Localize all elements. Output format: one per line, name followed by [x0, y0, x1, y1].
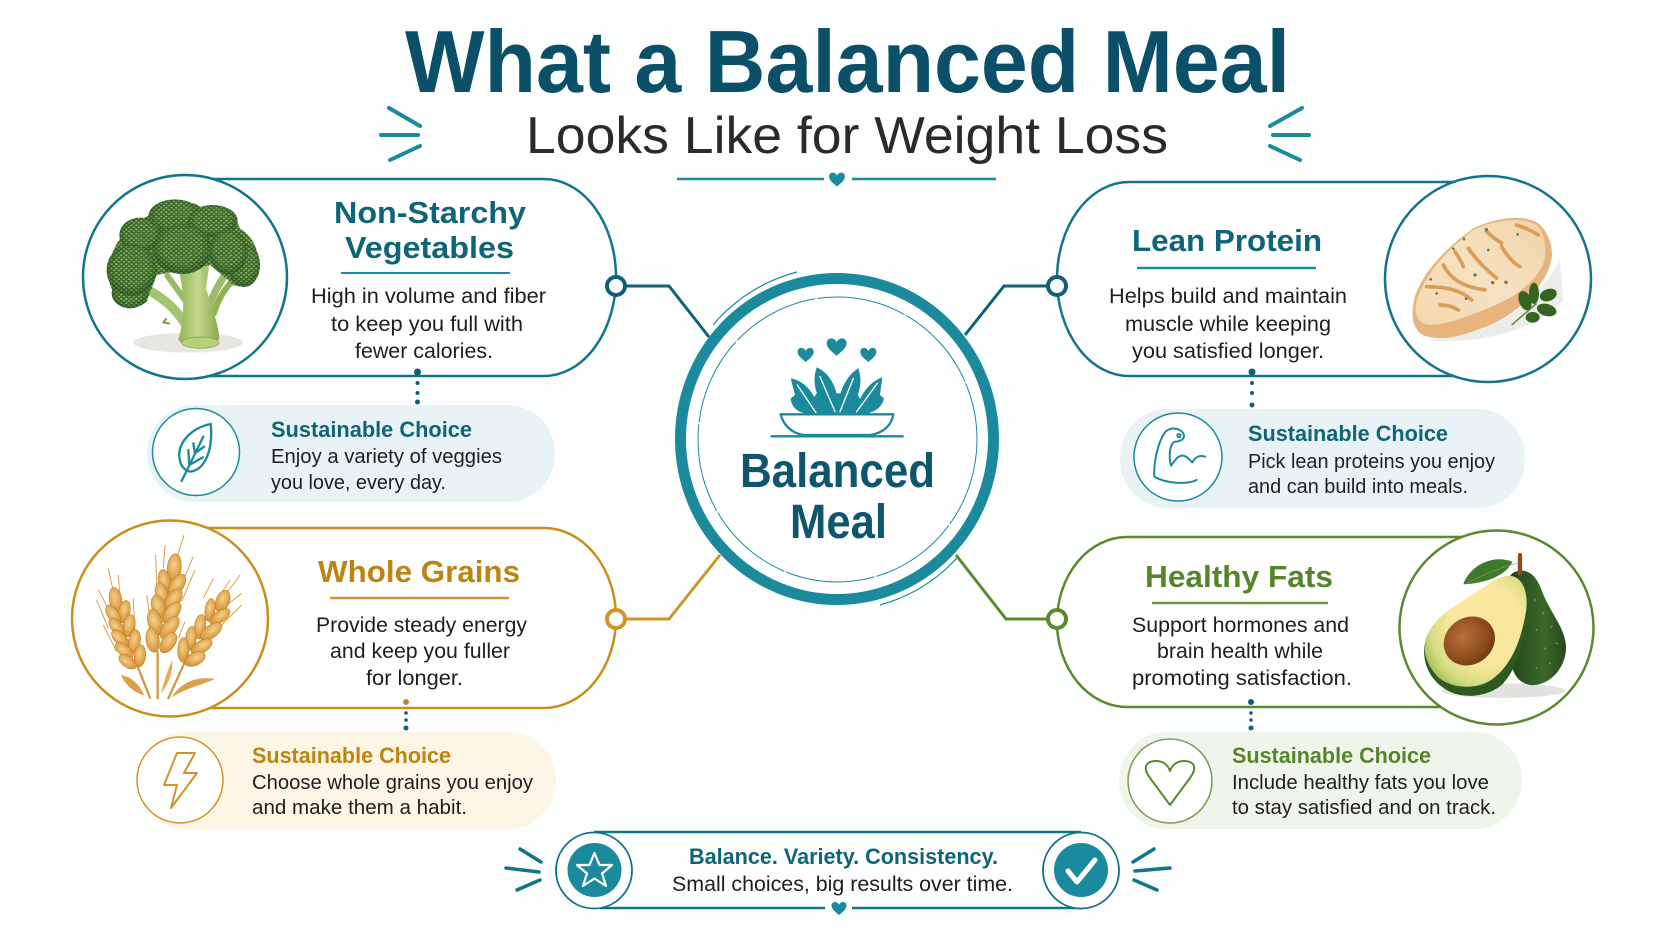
description: fewer calories. — [355, 340, 493, 363]
description — [1109, 285, 1347, 363]
heading: Non-Starchy — [334, 195, 527, 230]
description: promoting satisfaction. — [1132, 667, 1352, 690]
panel: lean protein — [1048, 176, 1591, 408]
icon: footer rays left — [506, 849, 541, 890]
panel: whole grains — [72, 520, 625, 730]
panel: vegetables sustainable choice — [147, 405, 555, 502]
title divider with heart — [677, 173, 996, 187]
heading — [334, 195, 527, 265]
heading: Healthy Fats — [1145, 559, 1333, 594]
description: for longer. — [366, 667, 463, 690]
image circle: avocado — [1400, 530, 1594, 724]
icon: grilled chicken — [1413, 218, 1563, 341]
footer text: Balance. Variety. Consistency. — [689, 844, 998, 869]
heading underline — [341, 272, 510, 274]
image circle: wheat — [72, 520, 268, 716]
panel: healthy fats — [1048, 530, 1594, 730]
icon: heart — [1128, 739, 1212, 823]
icon: leaf — [152, 408, 240, 496]
description — [1132, 614, 1352, 690]
icon: salad bowl with hearts — [772, 338, 903, 436]
dotted connector — [414, 368, 421, 404]
heading underline — [330, 597, 509, 599]
heading: Lean Protein — [1132, 223, 1322, 258]
description: and keep you fuller — [330, 640, 510, 663]
panel: protein sustainable choice — [1120, 409, 1525, 508]
icon: title rays left — [381, 108, 420, 160]
connector: vegetables to center — [625, 286, 709, 337]
text: you love, every day. — [271, 472, 446, 494]
description: you satisfied longer. — [1132, 340, 1324, 363]
description: Helps build and maintain — [1109, 285, 1347, 308]
icon: avocado — [1424, 555, 1566, 698]
text: Sustainable Choice — [252, 743, 451, 768]
heading: Whole Grains — [318, 554, 520, 589]
footer text — [672, 844, 1013, 896]
connector node — [607, 610, 625, 628]
center circle: balanced meal — [680, 272, 994, 605]
image circle: broccoli — [83, 175, 287, 379]
icon: broccoli — [107, 199, 260, 353]
connector: fats to center — [956, 555, 1047, 619]
panel: grains sustainable choice — [137, 732, 556, 829]
dotted connector — [1248, 699, 1254, 730]
icon: footer heart — [832, 902, 846, 915]
icon: wheat — [97, 535, 242, 698]
panel: non-starchy vegetables — [83, 175, 625, 404]
footer banner — [506, 832, 1170, 915]
center label: Meal — [790, 496, 887, 549]
text: Pick lean proteins you enjoy — [1248, 451, 1495, 473]
icon: lightning bolt — [137, 737, 223, 823]
text — [1248, 421, 1495, 498]
text — [271, 417, 502, 494]
text: and make them a habit. — [252, 797, 467, 819]
connector node — [607, 277, 625, 295]
icon: footer rays right — [1133, 849, 1170, 890]
icon: check badge — [1043, 832, 1119, 908]
title: What a Balanced Meal — [405, 12, 1290, 111]
description: Support hormones and — [1132, 614, 1349, 637]
heading: Vegetables — [345, 230, 514, 265]
center label: Balanced — [740, 445, 935, 498]
connector: protein to center — [965, 286, 1047, 335]
text — [1232, 743, 1496, 819]
text: Sustainable Choice — [1232, 743, 1431, 768]
image circle: chicken — [1385, 176, 1591, 382]
panel: fats sustainable choice — [1119, 732, 1522, 829]
text: and can build into meals. — [1248, 476, 1468, 498]
subtitle: Looks Like for Weight Loss — [526, 107, 1168, 165]
description — [311, 285, 546, 363]
icon: title rays right — [1270, 108, 1309, 160]
description: High in volume and fiber — [311, 285, 546, 308]
text: Enjoy a variety of veggies — [271, 446, 502, 468]
description — [316, 614, 527, 690]
description: Provide steady energy — [316, 614, 527, 637]
text: Sustainable Choice — [1248, 421, 1448, 446]
description: muscle while keeping — [1125, 313, 1331, 336]
connector: grains to center — [625, 555, 720, 619]
text — [252, 743, 533, 819]
text: Sustainable Choice — [271, 417, 472, 442]
text: Include healthy fats you love — [1232, 772, 1489, 794]
connector node — [1048, 610, 1066, 628]
heading underline — [1152, 602, 1328, 604]
description: to keep you full with — [331, 313, 523, 336]
connector node — [1048, 277, 1066, 295]
icon: star badge — [556, 832, 632, 908]
text: Choose whole grains you enjoy — [252, 772, 533, 794]
icon: flexed arm — [1134, 413, 1222, 501]
heading underline — [1137, 267, 1316, 269]
description: brain health while — [1157, 640, 1323, 663]
dotted connector — [1248, 368, 1256, 408]
dotted connector — [403, 699, 409, 730]
text: to stay satisfied and on track. — [1232, 797, 1496, 819]
center label — [740, 445, 935, 549]
footer text: Small choices, big results over time. — [672, 873, 1013, 896]
